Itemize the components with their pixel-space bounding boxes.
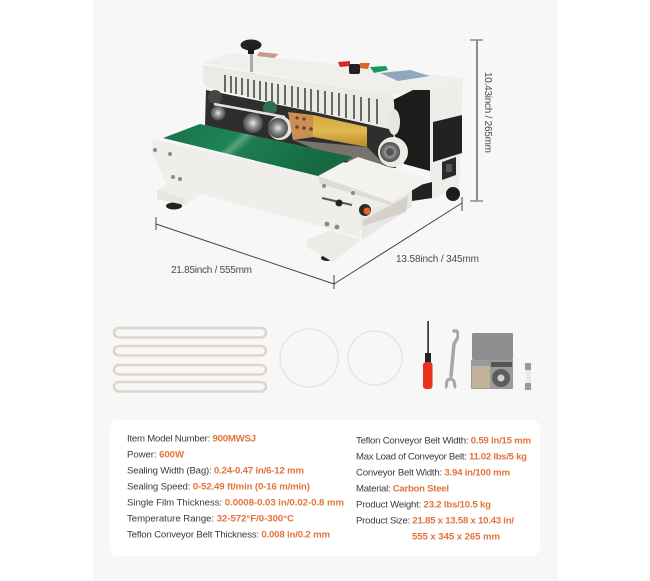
- accessories: conveyor ring large: [280, 329, 338, 387]
- spec: material: Material: Carbon Steel: [356, 484, 449, 494]
- large front roller: [378, 137, 408, 167]
- spec: product size: Product Size: 21.85 x 13.58 x 10.43 in/: [356, 516, 514, 526]
- lower mechanism: [293, 140, 385, 165]
- right front foot: [307, 230, 361, 262]
- control panel switches: [338, 61, 430, 81]
- mechanism background: [205, 90, 396, 168]
- feed table top: [318, 157, 430, 202]
- spec: product weight: Product Weight: 23.2 lbs/10.5 kg: [356, 500, 491, 510]
- spec: power: Power: 600W: [127, 450, 185, 460]
- specifications card: [110, 420, 540, 556]
- frame screws: [153, 148, 355, 229]
- bracket opening: [363, 196, 408, 226]
- left foot: [157, 182, 203, 210]
- specifications right column: [356, 436, 531, 542]
- conveyor belt: [163, 124, 353, 176]
- feed table edge: [318, 176, 392, 205]
- rear indicator plate: [257, 52, 279, 58]
- product illustration: band sealer machine: [152, 40, 463, 262]
- spec: conveyor belt width: Conveyor Belt Width: 3.94 in/100 mm: [356, 468, 510, 478]
- icon: fuse: [525, 363, 531, 390]
- gold sealing block: [313, 115, 367, 147]
- spec: max load of conveyor belt: Max Load of Conveyor Belt: 11.02 lbs/5 kg: [356, 452, 527, 462]
- rear warning label: [433, 115, 462, 162]
- background panel: [93, 0, 557, 581]
- spec: product size metric: 555 x 345 x 265 mm: [412, 532, 500, 542]
- machine side panel: [430, 78, 463, 200]
- spec: teflon conveyor belt thickness: Teflon Conveyor Belt Thickness: 0.008 in/0.2 mm: [127, 530, 330, 540]
- spec: temperature range: Temperature Range: 32-572°F/0-300°C: [127, 514, 294, 524]
- temperature knob: [240, 40, 262, 72]
- conveyor frame: [152, 139, 392, 238]
- width dimension line: [156, 217, 334, 289]
- frame rear right bracket: [358, 190, 412, 240]
- dark bracket plate: [412, 182, 432, 201]
- brass heating block: [288, 112, 313, 140]
- spec: sealing speed: Sealing Speed: 0-52.49 ft/min (0-16 m/min): [127, 482, 310, 492]
- depth dimension line: [334, 197, 462, 284]
- spec: teflon conveyor belt width: Teflon Conveyor Belt Width: 0.59 in/15 mm: [356, 436, 531, 446]
- spec: sealing width: Sealing Width (Bag): 0.24-0.47 in/6-12 mm: [127, 466, 304, 476]
- upper right white roller: [388, 109, 400, 135]
- top face of machine: [203, 53, 463, 95]
- height dimension line: [470, 40, 483, 201]
- accessories: sealing bands: [114, 328, 266, 392]
- spec: single film thickness: Single Film Thickness: 0.0008-0.03 in/0.02-0.8 mm: [127, 498, 344, 508]
- height label: 10.43inch / 265mm: [482, 72, 493, 153]
- black side plate: [393, 90, 430, 171]
- depth label: 13.58inch / 345mm: [396, 254, 479, 265]
- icon: wrench: [446, 331, 458, 387]
- icon: screwdriver: [423, 321, 432, 389]
- ventilation slots: [225, 75, 377, 124]
- right rear foot: [446, 187, 460, 201]
- accessories: conveyor ring small: [348, 331, 402, 385]
- adjustment lever: [322, 198, 371, 216]
- width label: 21.85inch / 555mm: [171, 265, 252, 276]
- power socket: [442, 157, 456, 180]
- spec: item model number: Item Model Number: 900MWSJ: [127, 434, 256, 444]
- front perforated cover: [203, 65, 394, 130]
- sealing belt strip: [214, 104, 285, 117]
- specifications left column: [127, 434, 344, 540]
- icon: type character box: [471, 333, 513, 389]
- pressure rollers: [208, 90, 292, 140]
